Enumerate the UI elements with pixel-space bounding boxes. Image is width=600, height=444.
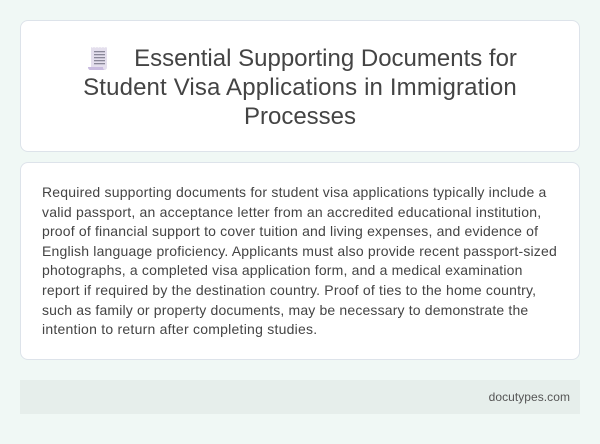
icon: document	[88, 47, 107, 70]
text block: description: English language proficiency. Applicants must also provide recent passport-sized	[42, 243, 557, 259]
title: Processes	[244, 103, 356, 130]
text block: description: Required supporting documents for student visa applications typically include a	[42, 184, 547, 200]
text block: description: proof of financial support to cover tuition and living expenses, and evidence of	[42, 223, 538, 239]
text block: description: photographs, a completed visa application form, and a medical examination	[42, 262, 523, 278]
footer text: docutypes.com	[489, 390, 570, 404]
panel: title card	[20, 20, 580, 152]
text block: description: valid passport, an acceptance letter from an accredited educational institution,	[42, 204, 541, 220]
title	[83, 45, 517, 130]
text block: description	[42, 184, 557, 337]
title: Student Visa Applications in Immigration	[83, 74, 517, 101]
text block: description: intention to return after completing studies.	[42, 321, 317, 337]
text block: description: report if required by the destination country. Proof of ties to the home country,	[42, 282, 536, 298]
footer bar	[20, 380, 580, 414]
text block: description: such as family or property documents, may be necessary to demonstrate the	[42, 302, 528, 318]
title: Essential Supporting Documents for	[134, 45, 517, 72]
panel: description	[20, 162, 580, 360]
